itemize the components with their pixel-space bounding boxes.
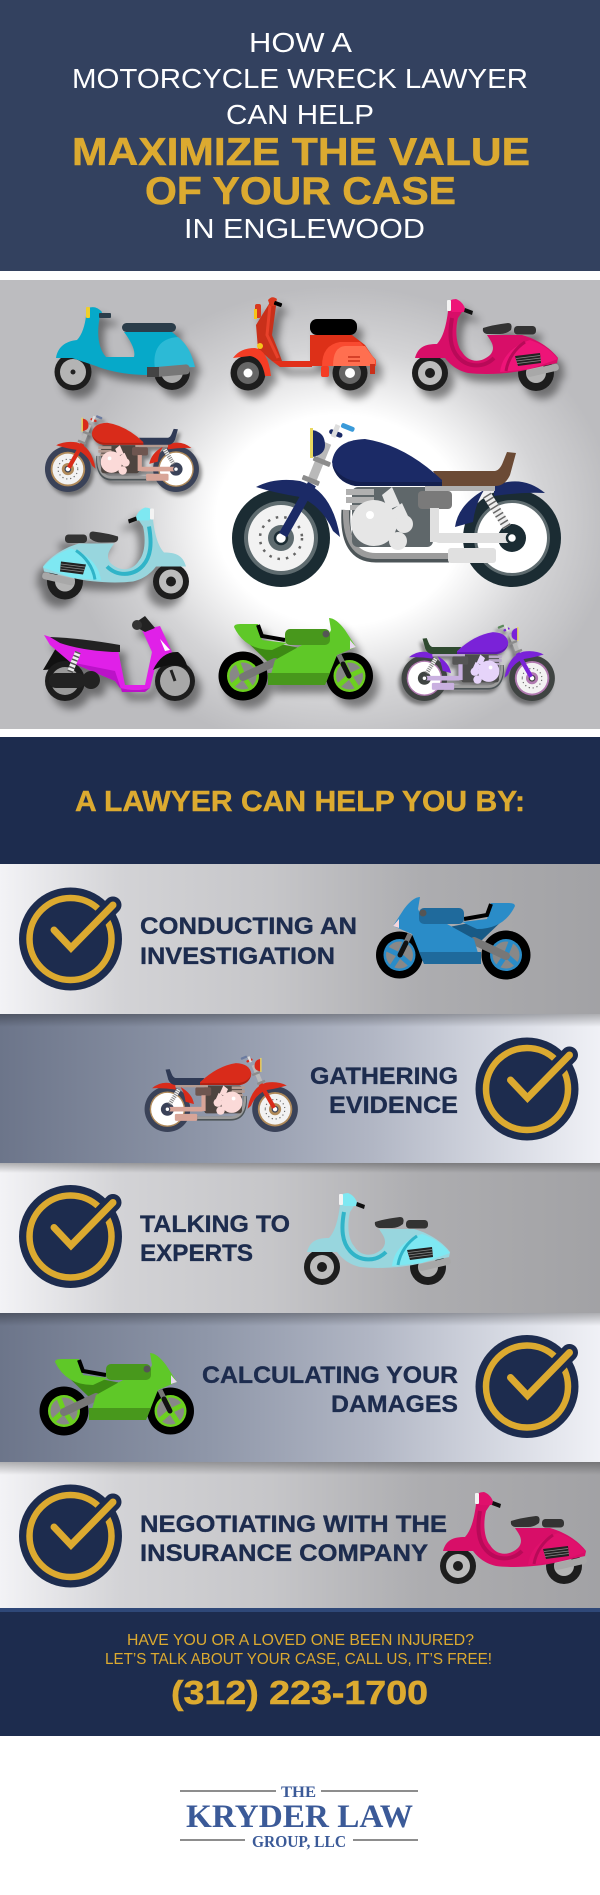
- icon: check mark: [19, 888, 122, 990]
- icon: red cruiser: [45, 415, 199, 492]
- title text: MAXIMIZE THE VALUE: [72, 131, 530, 174]
- icon: pink scooter: [440, 1492, 587, 1584]
- panel: gathering evidence: [0, 1014, 600, 1163]
- title text: HOW A: [249, 27, 352, 58]
- logo: the kryder law group: THE: [281, 1784, 316, 1801]
- text: talking to experts: [140, 1211, 290, 1267]
- icon: check mark: [476, 1335, 578, 1438]
- title text: OF YOUR CASE: [145, 170, 456, 213]
- text: negotiating with the insurance company: NEGOTIATING WITH THE: [140, 1511, 447, 1538]
- text: calculating your damages: [202, 1362, 458, 1418]
- logo: the kryder law group: KRYDER LAW: [186, 1799, 413, 1835]
- icon: purple cruiser: [402, 624, 555, 701]
- icon: green sport bike: [218, 618, 373, 700]
- heading: A LAWYER CAN HELP YOU BY:: [75, 786, 525, 818]
- panel: conducting an investigation: [0, 864, 600, 1014]
- title text: IN ENGLEWOOD: [184, 213, 425, 244]
- text: talking to experts: TALKING TO: [140, 1211, 290, 1238]
- call to action text: LET’S TALK ABOUT YOUR CASE, CALL US, IT’S FREE!: [105, 1651, 492, 1668]
- heading panel: a lawyer can help you by: [0, 737, 600, 864]
- icon: navy cruiser: [232, 423, 561, 587]
- text: conducting an investigation: CONDUCTING AN: [140, 913, 357, 940]
- icon: pale blue scooter: [42, 508, 189, 600]
- text: talking to experts: EXPERTS: [140, 1240, 253, 1267]
- icon: green sport bike: [40, 1353, 194, 1436]
- icon: red scooter: [230, 297, 376, 390]
- text: conducting an investigation: INVESTIGATION: [140, 943, 335, 970]
- text: conducting an investigation: [140, 913, 357, 970]
- call to action text: HAVE YOU OR A LOVED ONE BEEN INJURED?: [127, 1632, 474, 1649]
- call to action text: [105, 1632, 492, 1668]
- title text: MOTORCYCLE WRECK LAWYER: [72, 63, 528, 94]
- icon: magenta scooter: [43, 616, 195, 701]
- text: calculating your damages: DAMAGES: [331, 1391, 458, 1418]
- icon: check mark: [19, 1185, 122, 1288]
- panel: motorcycle collection: [0, 280, 600, 729]
- icon: pink scooter: [412, 299, 559, 391]
- panel: calculating your damages: [0, 1313, 600, 1462]
- text: calculating your damages: CALCULATING YOUR: [202, 1362, 458, 1389]
- logo: the kryder law group: GROUP, LLC: [252, 1832, 346, 1851]
- text: negotiating with the insurance company: [140, 1511, 447, 1567]
- text: gathering evidence: GATHERING: [310, 1063, 458, 1090]
- title text: [72, 27, 530, 244]
- phone number: (312) 223-1700: [171, 1674, 428, 1711]
- text: gathering evidence: EVIDENCE: [329, 1092, 458, 1119]
- panel: call to action: [0, 1608, 600, 1736]
- title panel: [0, 0, 600, 271]
- panel: talking to experts: [0, 1163, 600, 1313]
- icon: check mark: [19, 1484, 122, 1588]
- icon: check mark: [476, 1038, 578, 1140]
- icon: pale blue scooter: [304, 1193, 451, 1285]
- text: negotiating with the insurance company: INSURANCE COMPANY: [140, 1540, 428, 1567]
- icon: red cruiser: [145, 1055, 298, 1132]
- text: gathering evidence: [310, 1063, 458, 1119]
- panel: negotiating with the insurance company: [0, 1462, 600, 1608]
- icon: cyan scooter: [54, 307, 195, 390]
- logo: the kryder law group: [180, 1784, 418, 1851]
- title text: CAN HELP: [226, 99, 374, 130]
- icon: blue sport bike: [376, 897, 530, 980]
